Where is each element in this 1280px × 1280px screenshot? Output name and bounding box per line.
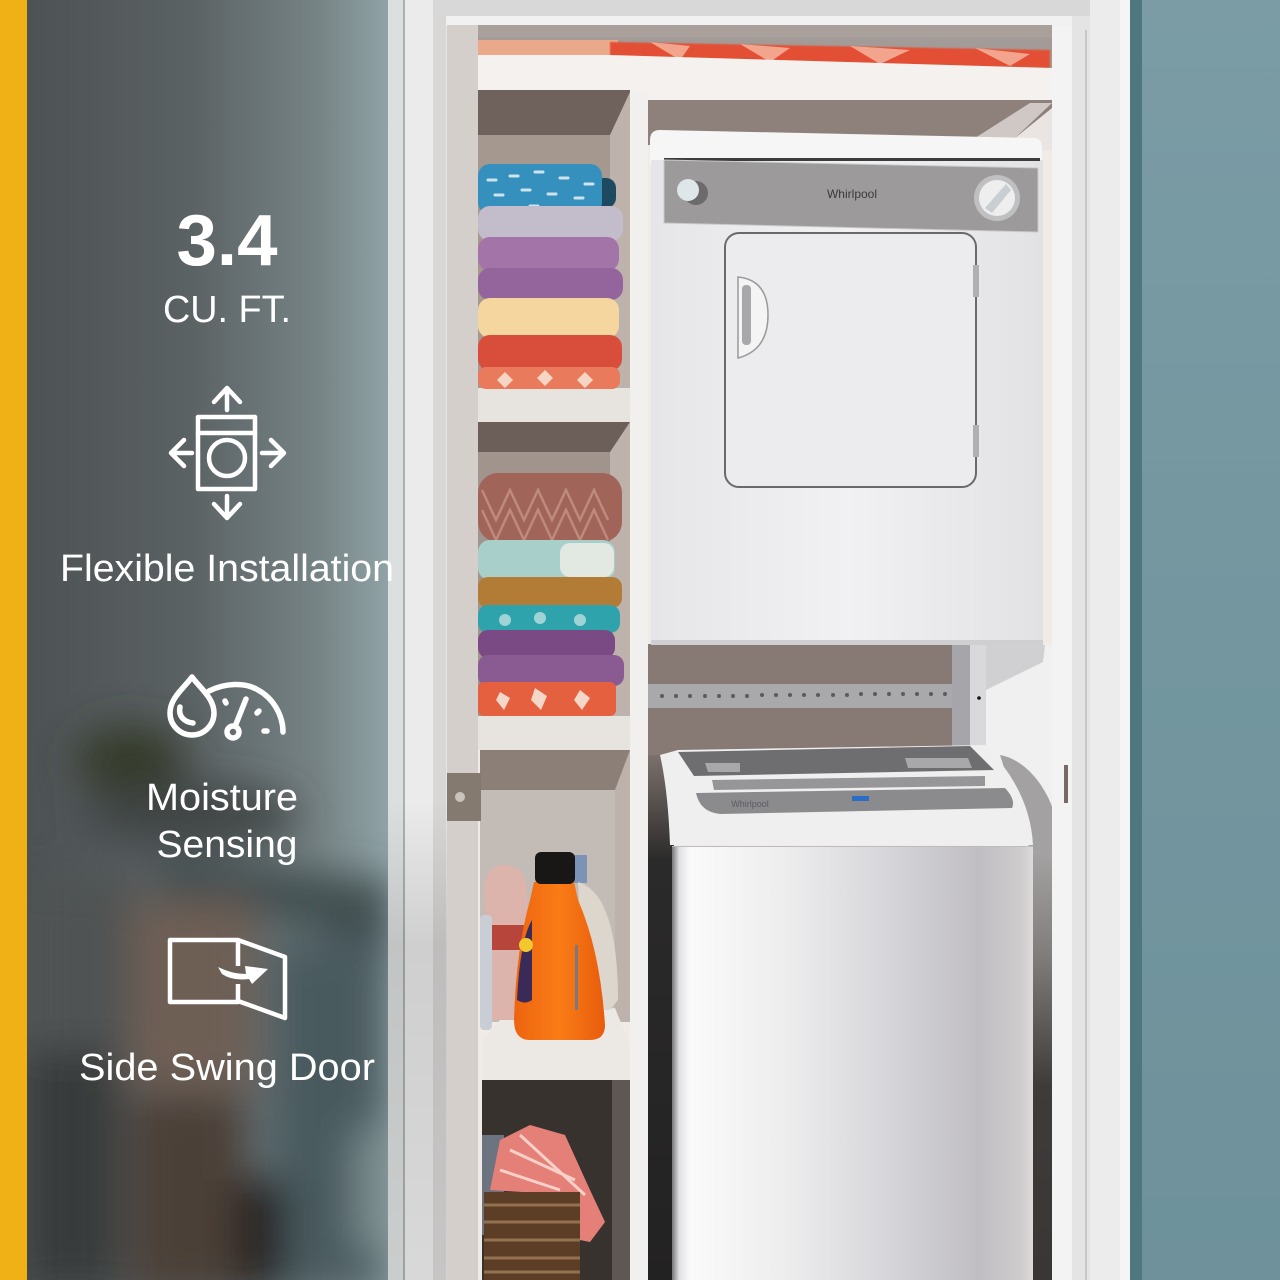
top flower band [478, 36, 1052, 68]
towels: upper shelf [478, 164, 623, 389]
label: flexible installation: Flexible Installation [60, 548, 394, 590]
rail holes [660, 692, 947, 698]
lid [678, 746, 994, 776]
dial [974, 175, 1020, 221]
white bottle [573, 855, 587, 883]
icon: side swing door [170, 940, 285, 1018]
body [672, 846, 1033, 1280]
label: side swing door: Side Swing Door [79, 1047, 375, 1089]
top board [478, 55, 1052, 103]
dark gap [648, 755, 674, 1280]
control strip [696, 788, 1013, 814]
left cubby backs [478, 90, 630, 1280]
handle [738, 277, 768, 358]
cap [535, 852, 575, 884]
right bay backs [648, 100, 1052, 760]
washer [648, 745, 1033, 1280]
icon: moisture sensing [170, 677, 283, 738]
hinges [973, 265, 979, 297]
shelves [478, 92, 648, 1280]
door [725, 233, 976, 487]
panel: blurred room background [0, 0, 395, 1280]
pink bottle [484, 865, 527, 1020]
panel: wall on right [1128, 0, 1280, 1280]
title stat: 3.4 cu. ft.: 3.4 [176, 201, 278, 281]
small bottle [480, 915, 492, 1030]
label: moisture sensing: Moisture [146, 777, 298, 819]
title stat: 3.4 cu. ft. [163, 201, 291, 331]
label [517, 920, 532, 1002]
top [650, 130, 1042, 165]
laundry basket [482, 1125, 605, 1280]
panel: door frame [388, 0, 1130, 1280]
panel: closet interior [445, 20, 1075, 1280]
accent bar [0, 0, 27, 1280]
title stat: 3.4 cu. ft.: CU. FT. [163, 289, 291, 331]
washer: Whirlpool [731, 799, 769, 809]
towels: middle shelf [478, 473, 624, 716]
brand: Whirlpool [827, 187, 877, 201]
label: moisture sensing [146, 777, 298, 866]
start button [684, 181, 708, 205]
icon: flexible installation [171, 388, 284, 518]
label: moisture sensing: Sensing [156, 824, 298, 866]
orange detergent bottle [514, 882, 605, 1040]
upper housing [660, 745, 1033, 845]
body [651, 160, 1043, 645]
dryer [650, 130, 1043, 645]
side bracket and side panel [952, 645, 1060, 1280]
bottles on shelf [480, 852, 618, 1040]
control panel [664, 160, 1038, 232]
